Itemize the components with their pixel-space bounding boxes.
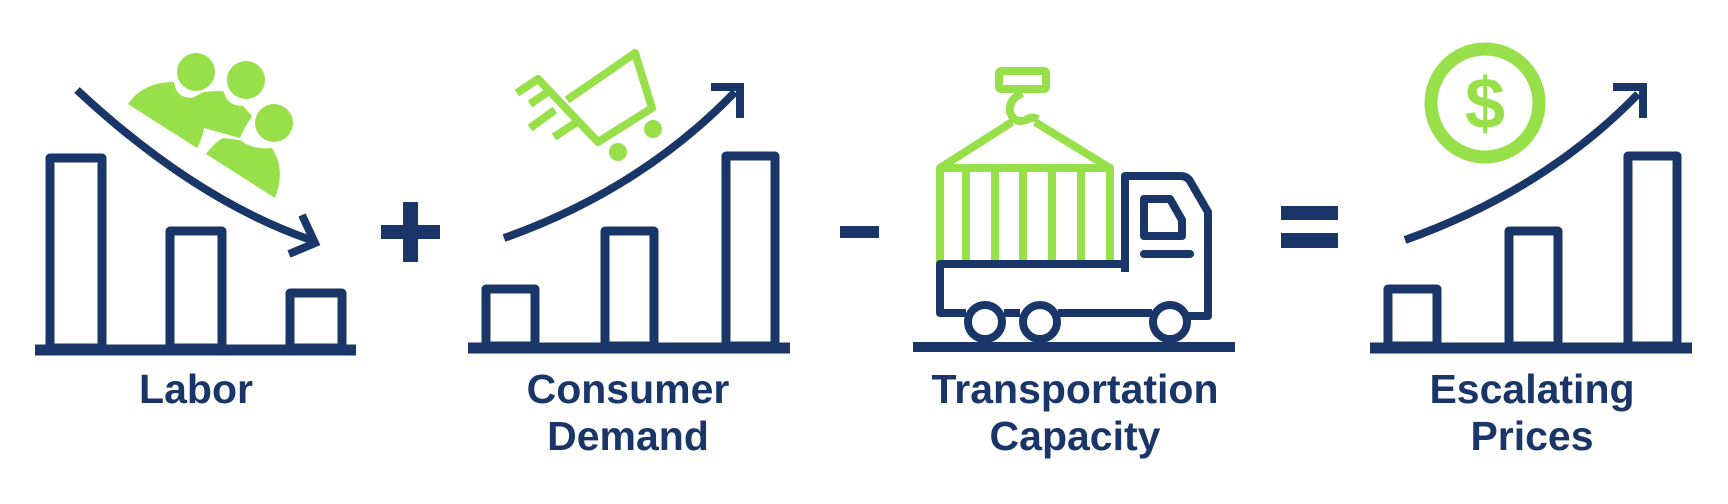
icon: dollar coin: $ bbox=[1465, 64, 1505, 144]
panel: transportation capacity bbox=[913, 71, 1235, 459]
icon: people bbox=[128, 53, 293, 198]
operator: plus bbox=[381, 202, 440, 262]
label: Consumer Demand: Consumer bbox=[527, 366, 729, 412]
panel: consumer demand: Demand bbox=[547, 413, 709, 459]
icon: truck bbox=[913, 176, 1235, 347]
panel: escalating prices bbox=[1370, 49, 1692, 459]
operator: minus bbox=[840, 226, 879, 238]
arrow: downward bbox=[77, 90, 315, 254]
panel: labor bbox=[35, 53, 356, 412]
arrow: upward bbox=[1405, 87, 1643, 240]
icon: shopping cart bbox=[517, 53, 658, 157]
label: Labor: Labor bbox=[139, 366, 253, 412]
bar chart: rising bbox=[1370, 156, 1692, 348]
arrow: upward bbox=[504, 87, 740, 238]
icon: crane container bbox=[940, 71, 1110, 264]
label: Transportation Capacity: Transportation bbox=[931, 366, 1219, 412]
icon: dollar coin bbox=[1431, 49, 1539, 157]
bar chart: labor declining bbox=[35, 158, 356, 350]
panel: consumer demand bbox=[468, 53, 790, 459]
panel: transportation capacity: Capacity bbox=[990, 413, 1161, 459]
panel: escalating prices: Prices bbox=[1470, 413, 1594, 459]
operator: equals bbox=[1281, 206, 1338, 248]
label: Escalating Prices: Escalating bbox=[1429, 366, 1635, 412]
bar chart: rising bbox=[468, 156, 790, 348]
